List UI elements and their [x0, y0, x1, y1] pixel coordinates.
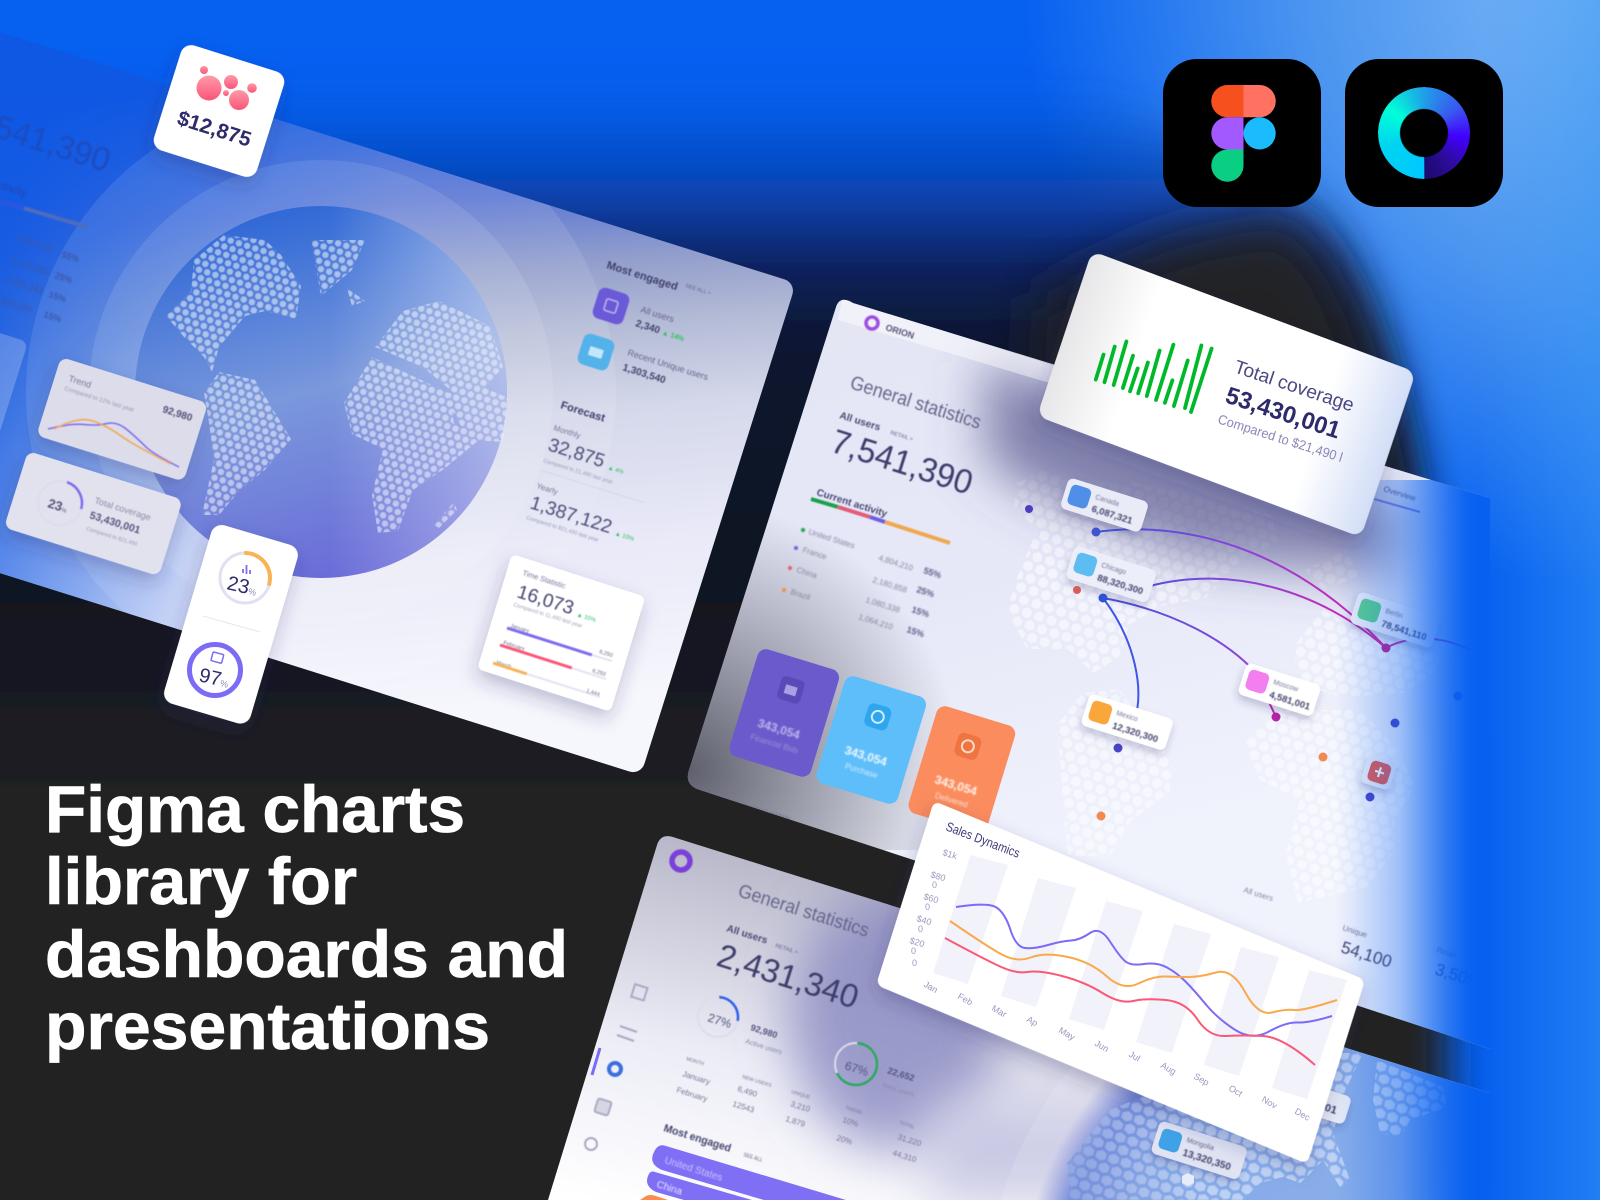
line: red — [945, 938, 1315, 1065]
orion logo — [866, 317, 916, 341]
activity rows — [782, 527, 943, 639]
time statistic card: March — [495, 660, 512, 671]
ring 27% — [696, 995, 783, 1057]
tile: orange: Delivered — [934, 791, 969, 810]
tooltip: Mexico: 12,320,300 — [1111, 721, 1159, 745]
time statistic card: 6,250 — [598, 649, 613, 659]
forecast block: Yearly — [535, 481, 559, 497]
icon: figma logo — [1163, 59, 1321, 207]
most engaged list: All users — [639, 304, 676, 324]
x axis labels: Ap — [1025, 1014, 1040, 1028]
faded stats at panel left: 884,280 — [0, 295, 33, 315]
tooltip: Moscow — [1237, 662, 1322, 717]
forecast block: 1,387,122 ▲ 10% — [527, 493, 639, 546]
faded stats at panel left: 1,080,343 — [3, 274, 45, 296]
footer: ORION DATA VISUALIZATION — [715, 794, 791, 823]
forecast block: Forecast — [559, 399, 607, 425]
line: purple — [956, 905, 1332, 1036]
forecast block: Compared to 21,490 last year — [542, 458, 613, 486]
hex world map — [1010, 481, 1373, 828]
total coverage small card — [4, 451, 183, 576]
partial tooltip: ,001 — [1314, 1099, 1338, 1117]
table: January — [681, 1069, 711, 1086]
icon: pink bubbles — [196, 66, 257, 110]
right fade — [1330, 480, 1490, 1060]
tile: blue — [814, 674, 928, 806]
x axis labels: Sep — [1192, 1071, 1211, 1088]
tile: blue: Purchase — [844, 762, 879, 780]
tile: blue: 343,054 — [843, 743, 889, 769]
heading: All users — [838, 410, 882, 434]
ring 27%: Active users — [744, 1038, 783, 1057]
forecast block — [525, 399, 645, 546]
card: sales dynamics — [876, 801, 1365, 1164]
faded stats at panel left: 15% — [47, 289, 68, 304]
most engaged list: 2,340 ▲ 14% — [634, 318, 686, 344]
trend card: Compared to 12% last year — [63, 386, 135, 414]
title: library for — [45, 844, 357, 918]
y axis labels: $80 — [929, 869, 947, 883]
activity rows: 15% — [905, 624, 926, 639]
sidebar icons — [585, 984, 648, 1150]
mongolia tooltip — [1150, 1120, 1248, 1180]
icon: orion logo — [1345, 59, 1503, 207]
current activity bar: Current activity — [815, 487, 889, 520]
orion logo: ORION — [884, 322, 916, 341]
gauge 97%: 97% — [197, 664, 231, 693]
heading: General statistics — [847, 372, 984, 434]
card: total coverage — [1037, 251, 1416, 537]
heading and total: RETAIL > — [774, 943, 799, 956]
most engaged pills: United States — [663, 1155, 724, 1184]
tooltip: Canada — [1060, 477, 1149, 533]
bottom map stats: 54,100 — [1339, 938, 1394, 971]
y axis labels: 0 — [925, 902, 930, 912]
activity rows: 1,080,338 — [864, 595, 902, 615]
table: 44,310 — [891, 1148, 918, 1164]
table: 12543 — [731, 1099, 756, 1115]
x axis labels — [922, 979, 1312, 1123]
activity rows: Brazil — [789, 587, 811, 602]
table: 10% — [841, 1115, 859, 1129]
heading and total — [716, 884, 869, 1008]
most engaged list — [576, 259, 712, 386]
partial tooltip — [1320, 1090, 1352, 1131]
bottom map stats: All users — [1242, 885, 1274, 903]
partial card at left edge — [0, 333, 26, 431]
table: 3,210 — [789, 1099, 812, 1114]
x axis labels: Aug — [1159, 1060, 1178, 1077]
globe fragment — [1040, 1047, 1490, 1200]
ring 67%: New users — [881, 1082, 916, 1099]
tooltip: Chicago — [1065, 545, 1157, 603]
tile: orange — [906, 704, 1017, 835]
tile: purple: 343,054 — [756, 716, 802, 742]
amount: $12,875 — [174, 107, 254, 152]
tooltip: Canada: Canada — [1094, 494, 1120, 508]
gauge 23% — [220, 553, 270, 603]
time statistic card: February — [502, 640, 525, 653]
total coverage small card: 23% — [46, 496, 70, 516]
y axis labels: 0 — [912, 958, 917, 968]
tooltip: red pin — [1360, 753, 1398, 791]
map dots — [1025, 505, 1462, 820]
table: 20% — [835, 1133, 853, 1147]
y axis labels: $1k — [941, 847, 959, 861]
table: TREND — [844, 1105, 863, 1116]
header strip — [838, 300, 1054, 382]
tooltip: Canada: 6,087,321 — [1090, 504, 1134, 527]
title: presentations — [45, 989, 490, 1063]
heading and total: All users — [725, 923, 769, 947]
faded stats at panel left: 3,120,950 — [9, 255, 51, 277]
current activity bar — [811, 487, 950, 543]
panel: globe dashboard — [0, 32, 793, 772]
x axis labels: Jul — [1127, 1049, 1142, 1063]
title: Figma charts — [45, 772, 465, 846]
table: TOTAL — [898, 1120, 915, 1131]
panel: map dashboard — [670, 290, 1490, 1070]
y axis labels: 0 — [918, 924, 923, 934]
time statistic card: January — [509, 623, 530, 635]
faded stats at panel left: 55% — [60, 249, 81, 264]
time statistic card: 6,250 — [591, 668, 606, 678]
time statistic card: 16,073 ▲ 10% — [514, 582, 601, 627]
ring 67%: 22,652 — [886, 1065, 916, 1083]
gauge 97% — [190, 644, 240, 696]
table: MONTH — [685, 1056, 705, 1068]
ring 67% — [833, 1041, 916, 1099]
tile: purple: Financial Bids — [749, 732, 799, 755]
heading — [827, 372, 984, 503]
most engaged pills — [640, 1122, 846, 1200]
activity rows: France — [801, 545, 828, 562]
x axis labels: Mar — [990, 1003, 1008, 1019]
total coverage small card: Compared to $21,490 — [85, 526, 138, 548]
faded stats at panel left: 4,804,210 — [14, 232, 56, 254]
logo ring — [672, 852, 690, 870]
activity rows: 2,180,858 — [871, 575, 909, 595]
card: total coverage: Compared to $21,490 l — [1216, 412, 1345, 465]
x axis labels: Nov — [1260, 1094, 1279, 1111]
chart columns — [933, 855, 1347, 1099]
panel: bottom dashboard — [500, 820, 1500, 1200]
activity rows: 1,064,210 — [857, 612, 895, 632]
heading: RETAIL > — [889, 430, 914, 443]
y axis labels: $20 — [908, 935, 926, 949]
map arcs — [1096, 529, 1470, 722]
tooltip: Moscow: 4,581,001 — [1268, 690, 1312, 713]
tooltip: Berlin: Berlin — [1384, 608, 1404, 620]
tile: orange: 343,054 — [933, 772, 979, 799]
overview tab — [1374, 484, 1420, 512]
most engaged pills: China — [655, 1179, 684, 1198]
tooltip: Chicago: Chicago — [1100, 562, 1127, 577]
x axis labels: Oct — [1227, 1083, 1245, 1099]
table: 6,490 — [736, 1084, 759, 1099]
floating card: $12,875 — [151, 42, 287, 180]
most engaged list: Most engaged — [605, 259, 679, 293]
tooltip: Berlin: 78,541,110 — [1380, 619, 1428, 643]
title — [45, 772, 568, 1063]
table: UNIQUE — [790, 1089, 811, 1101]
ring 27%: 92,980 — [749, 1022, 779, 1040]
x axis labels: Jun — [1093, 1038, 1111, 1054]
y axis labels: $60 — [922, 891, 940, 905]
heading and total: General statistics — [735, 881, 872, 942]
activity rows: United States — [807, 527, 856, 550]
table — [675, 1056, 923, 1164]
line: orange — [950, 921, 1337, 1013]
coverage text: Total coverage — [1231, 357, 1357, 416]
bottom map stats: 3,509 — [1433, 960, 1479, 991]
faded stats at panel left — [0, 115, 110, 322]
ring 67%: 67% — [843, 1059, 871, 1079]
bottom map stats — [1242, 885, 1479, 991]
shadow of coverage card — [985, 360, 1400, 575]
tooltip: Moscow: Moscow — [1272, 679, 1300, 694]
mongolia tooltip: Mongolia — [1186, 1137, 1215, 1152]
right fade — [1344, 1050, 1490, 1200]
card: total coverage: 53,430,001 — [1222, 382, 1344, 444]
faded stats at panel left: 15% — [42, 309, 63, 324]
x axis labels: Dec — [1293, 1106, 1312, 1123]
time statistic card — [477, 554, 645, 712]
x axis labels: Feb — [956, 991, 974, 1007]
heading: 7,541,390 — [827, 422, 977, 503]
table: 31,220 — [896, 1132, 923, 1148]
trend card: 92,980 — [161, 404, 194, 424]
x axis labels: Jan — [922, 979, 940, 995]
mongolia tooltip: 13,320,350 — [1181, 1148, 1233, 1173]
activity rows: 55% — [922, 565, 943, 580]
total coverage small card: Total coverage — [93, 495, 152, 523]
heading and total: 2,431,340 — [713, 936, 863, 1016]
table: NEW USERS — [741, 1074, 773, 1089]
bar sparkline — [1096, 342, 1212, 412]
tile: purple — [727, 647, 841, 779]
table: February — [675, 1085, 709, 1104]
trend card: Trend — [67, 373, 93, 390]
forecast block: 32,875 ▲ 4% — [545, 435, 628, 479]
forecast block: Monthly — [552, 423, 582, 440]
chart title: Sales Dynamics — [944, 819, 1023, 861]
activity rows: 25% — [915, 584, 936, 599]
most engaged list: SEE ALL > — [684, 283, 712, 297]
globe — [130, 200, 515, 580]
total coverage small card: 53,430,001 — [88, 509, 142, 537]
gauge 23%: 23% — [225, 572, 259, 601]
y axis labels: 0 — [911, 946, 916, 956]
bottom map stats: Unique — [1341, 923, 1369, 940]
tooltip: Mexico: Mexico — [1115, 710, 1139, 724]
faded stats at panel left: 25% — [53, 270, 74, 285]
activity rows: 4,804,210 — [877, 553, 915, 573]
background: bottom left dark fill — [0, 1100, 620, 1200]
y axis labels: $40 — [915, 913, 933, 927]
y axis labels — [908, 847, 959, 968]
most engaged pills: Most engaged — [662, 1122, 732, 1155]
bottom map stats: Retail — [1435, 945, 1458, 960]
tooltip: Berlin — [1349, 591, 1441, 649]
most engaged list: 1,303,540 — [621, 362, 667, 386]
time statistic card: 1,444 — [585, 688, 600, 698]
time statistic card: Time Statistic — [521, 568, 567, 590]
x axis labels: May — [1057, 1025, 1077, 1042]
most engaged pills: SEE ALL — [742, 1152, 764, 1164]
tooltip: Chicago: 88,320,300 — [1096, 573, 1144, 597]
title: dashboards and — [45, 917, 568, 991]
map dot hexagon — [1182, 1173, 1194, 1186]
tooltip: Mexico — [1080, 693, 1174, 751]
forecast block: Compared to $21,490 last year — [525, 515, 599, 544]
overview tab: Overview — [1382, 484, 1417, 503]
activity rows: 15% — [910, 604, 931, 619]
table: 1,879 — [784, 1114, 807, 1129]
floating card: gauges — [161, 522, 301, 726]
trend card — [36, 357, 208, 482]
most engaged list: Recent Unique users — [626, 347, 710, 382]
ring 27%: 27% — [706, 1011, 734, 1031]
background: neutral dark area — [1020, 215, 1415, 700]
activity rows: China — [795, 565, 819, 580]
y axis labels: 0 — [932, 880, 937, 890]
time statistic card: Compared to 11,490 last year — [512, 602, 583, 630]
